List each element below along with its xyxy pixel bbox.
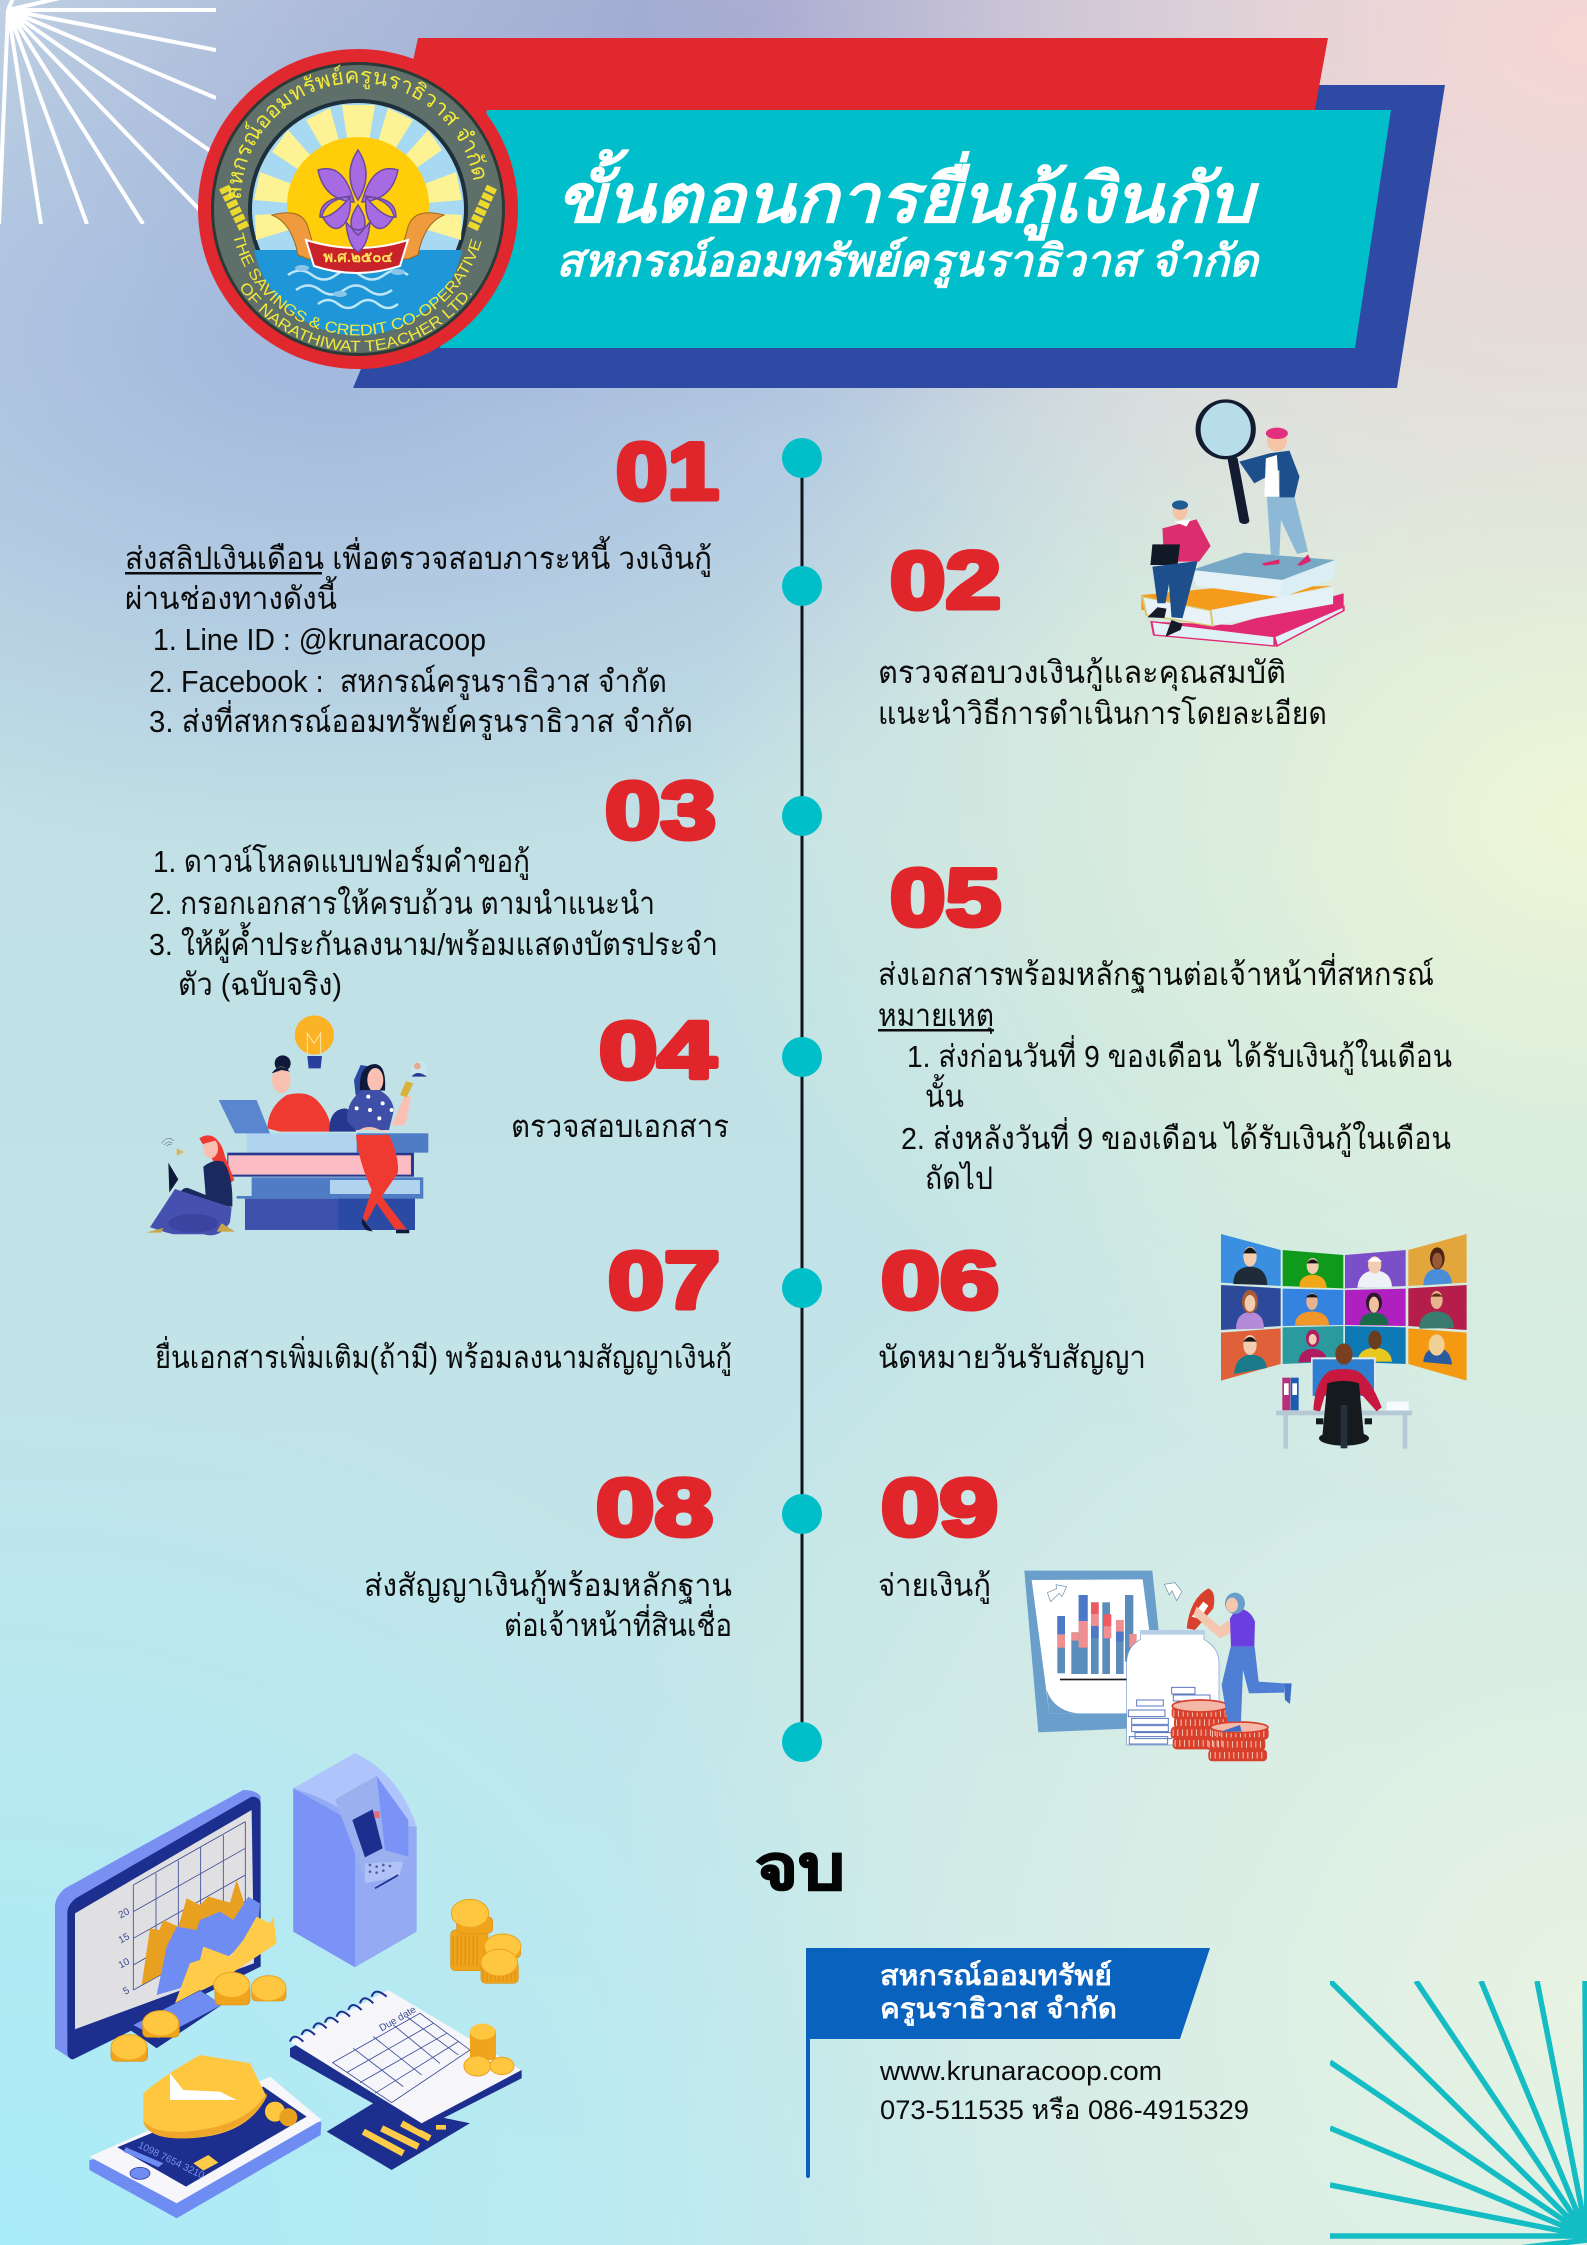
logo ring text: THE SAVINGS & CREDIT CO-OPERATIVE (234, 232, 482, 336)
step 05 text: หมายเหตุ (878, 998, 994, 1035)
icon: team working on stacked books (146, 1015, 428, 1235)
monitor: 20 (117, 1906, 132, 1921)
number 06: 06 (881, 1236, 999, 1326)
step 07 text: ยื่นเอกสารเพิ่มเติม(ถ้ามี) พร้อมลงนามสัญญาเงินกู้ (155, 1336, 732, 1376)
banner: red layer (400, 38, 1328, 120)
timeline (782, 438, 822, 1762)
step 04 (511, 1006, 729, 1144)
logo ring text: สหกรณ์ออมทรัพย์ครูนราธิวาส จำกัด (228, 64, 488, 198)
icon: finance isometric illustration (55, 1753, 522, 2218)
step 06 (878, 1236, 1146, 1375)
decorative sunburst: top left (0, 0, 216, 227)
contact block (806, 1948, 1249, 2178)
number 04: 04 (599, 1006, 716, 1096)
number 01: 01 (616, 427, 719, 517)
step 05 text: ถัดไป (925, 1161, 993, 1196)
step 03 text: 3. ให้ผู้ค้ำประกันลงนาม/พร้อมแสดงบัตรประจำ (149, 922, 718, 963)
step 07 (155, 1236, 732, 1376)
step 05 text: 2. ส่งหลังวันที่ 9 ของเดือน ได้รับเงินกู้ในเดือน (901, 1117, 1451, 1157)
banner: teal layer (440, 110, 1391, 348)
step 05 (878, 853, 1452, 1196)
number 02: 02 (890, 536, 1001, 626)
step 02 text: แนะนำวิธีการดำเนินการโดยละเอียด (878, 696, 1327, 731)
step 08 text: ส่งสัญญาเงินกู้พร้อมหลักฐาน (364, 1568, 732, 1604)
step 01 text: 2. Facebook : สหกรณ์ครูนราธิวาส จำกัด (149, 664, 667, 700)
icon: people on books with magnifier (1141, 401, 1344, 646)
flag pole (806, 2035, 810, 2178)
step 01 text: ผ่านช่องทางดังนี้ (125, 576, 337, 616)
flag banner (806, 1948, 1210, 2039)
logo ring text: OF NARATHIWAT TEACHER LTD. (241, 283, 472, 352)
step 05 text: นั้น (925, 1074, 964, 1114)
website: www.krunaracoop.com (879, 2056, 1162, 2086)
step 01 text (125, 536, 712, 740)
step 01 text: ส่งสลิปเงินเดือน เพื่อตรวจสอบภาระหนี้ วงเงินกู้ (125, 536, 712, 577)
step 02 (878, 536, 1327, 731)
step 05 text: 1. ส่งก่อนวันที่ 9 ของเดือน ได้รับเงินกู้ในเดือน (907, 1035, 1452, 1075)
calendar (290, 1990, 522, 2170)
decorative sunburst: bottom right (1330, 1981, 1587, 2245)
subtitle: สหกรณ์ออมทรัพย์ครูนราธิวาส จำกัด (556, 236, 1260, 289)
number 09: 09 (881, 1463, 998, 1553)
phone with shield (89, 2055, 322, 2218)
calendar: Due date (378, 2004, 419, 2034)
phone with shield: 1098 7654 3210 (136, 2140, 206, 2182)
monitor: 15 (117, 1931, 132, 1946)
cooperative logo (198, 49, 518, 369)
monitor (55, 1790, 277, 2059)
step 03 text: ตัว (ฉบับจริง) (178, 967, 342, 1002)
step 03 text: 1. ดาวน์โหลดแบบฟอร์มคำขอกู้ (153, 844, 530, 880)
step 08 text (364, 1568, 732, 1643)
step 03 text: 2. กรอกเอกสารให้ครบถ้วน ตามนำแนะนำ (149, 886, 655, 921)
step 01 text: 3. ส่งที่สหกรณ์ออมทรัพย์ครูนราธิวาส จำกัด (149, 700, 693, 740)
monitor: 10 (117, 1956, 132, 1971)
step 03 (149, 766, 718, 1002)
number 08: 08 (596, 1463, 713, 1553)
monitor: 5 (121, 1985, 132, 1997)
phone numbers: 073-511535 หรือ 086-4915329 (880, 2095, 1249, 2125)
timeline dots (782, 438, 822, 1762)
icon: savings jar and chart (1024, 1571, 1292, 1761)
number 07: 07 (608, 1236, 720, 1326)
step 01 text: 1. Line ID : @krunaracoop (153, 622, 486, 657)
number 05: 05 (890, 853, 1001, 943)
header banner (353, 38, 1445, 388)
cooperative name (880, 1960, 1117, 2026)
step 03 text (149, 844, 718, 1002)
atm (293, 1753, 417, 1967)
step 09 (878, 1463, 998, 1604)
step 09 text: จ่ายเงินกู้ (878, 1568, 991, 1604)
timeline line (800, 458, 804, 1742)
title: ขั้นตอนการยื่นกู้เงินกับ (556, 148, 1260, 241)
step 05 text: ส่งเอกสารพร้อมหลักฐานต่อเจ้าหน้าที่สหกรณ์ (878, 953, 1434, 993)
step 04 text: ตรวจสอบเอกสาร (511, 1109, 729, 1144)
step 01 (125, 427, 719, 740)
number 03: 03 (605, 766, 716, 856)
end label: จบ (755, 1834, 845, 1903)
step 08 (364, 1463, 732, 1643)
coin stacks (111, 1899, 521, 2061)
step 02 text (878, 655, 1327, 731)
icon: video meeting wall and desk (1221, 1234, 1467, 1449)
step 06 text: นัดหมายวันรับสัญญา (878, 1340, 1146, 1375)
banner: navy layer (353, 85, 1445, 388)
step 02 text: ตรวจสอบวงเงินกู้และคุณสมบัติ (878, 655, 1286, 692)
cooperative name: ครูนราธิวาส จำกัด (880, 1993, 1117, 2026)
logo ring text (228, 64, 488, 352)
cooperative logo: พ.ศ.๒๕๐๔ (323, 249, 393, 266)
step 08 text: ต่อเจ้าหน้าที่สินเชื่อ (504, 1604, 732, 1643)
cooperative name: สหกรณ์ออมทรัพย์ (880, 1960, 1112, 1991)
step 05 text (878, 953, 1452, 1196)
